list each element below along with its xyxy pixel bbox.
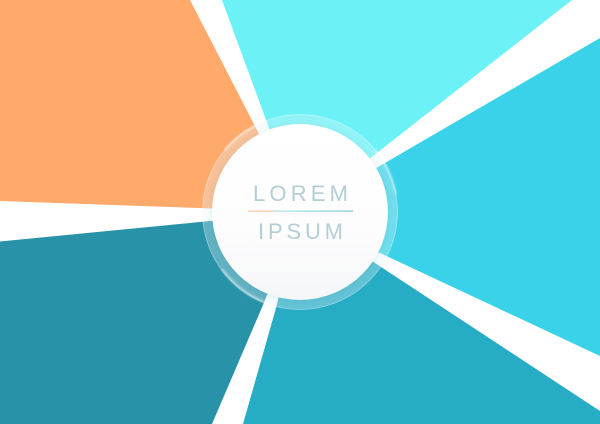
panel: blue segment: [300, 38, 600, 356]
panel: dark teal segment: [0, 212, 300, 424]
title: lorem: LOREM: [253, 181, 348, 206]
white disc: [212, 124, 388, 300]
panel: teal segment: [243, 212, 600, 424]
title: ipsum: IPSUM: [258, 219, 343, 244]
ring highlight: top left: [225, 125, 257, 150]
panel: light cyan segment: [222, 0, 572, 212]
glass ring: [202, 114, 398, 310]
divider rule: [248, 210, 353, 212]
ring highlight: top right: [375, 150, 396, 195]
ring highlight: bottom left: [222, 269, 264, 302]
badge: glass ring and disc: [202, 114, 398, 310]
panel: orange segment: [0, 0, 300, 212]
disc shadow: [212, 125, 388, 301]
